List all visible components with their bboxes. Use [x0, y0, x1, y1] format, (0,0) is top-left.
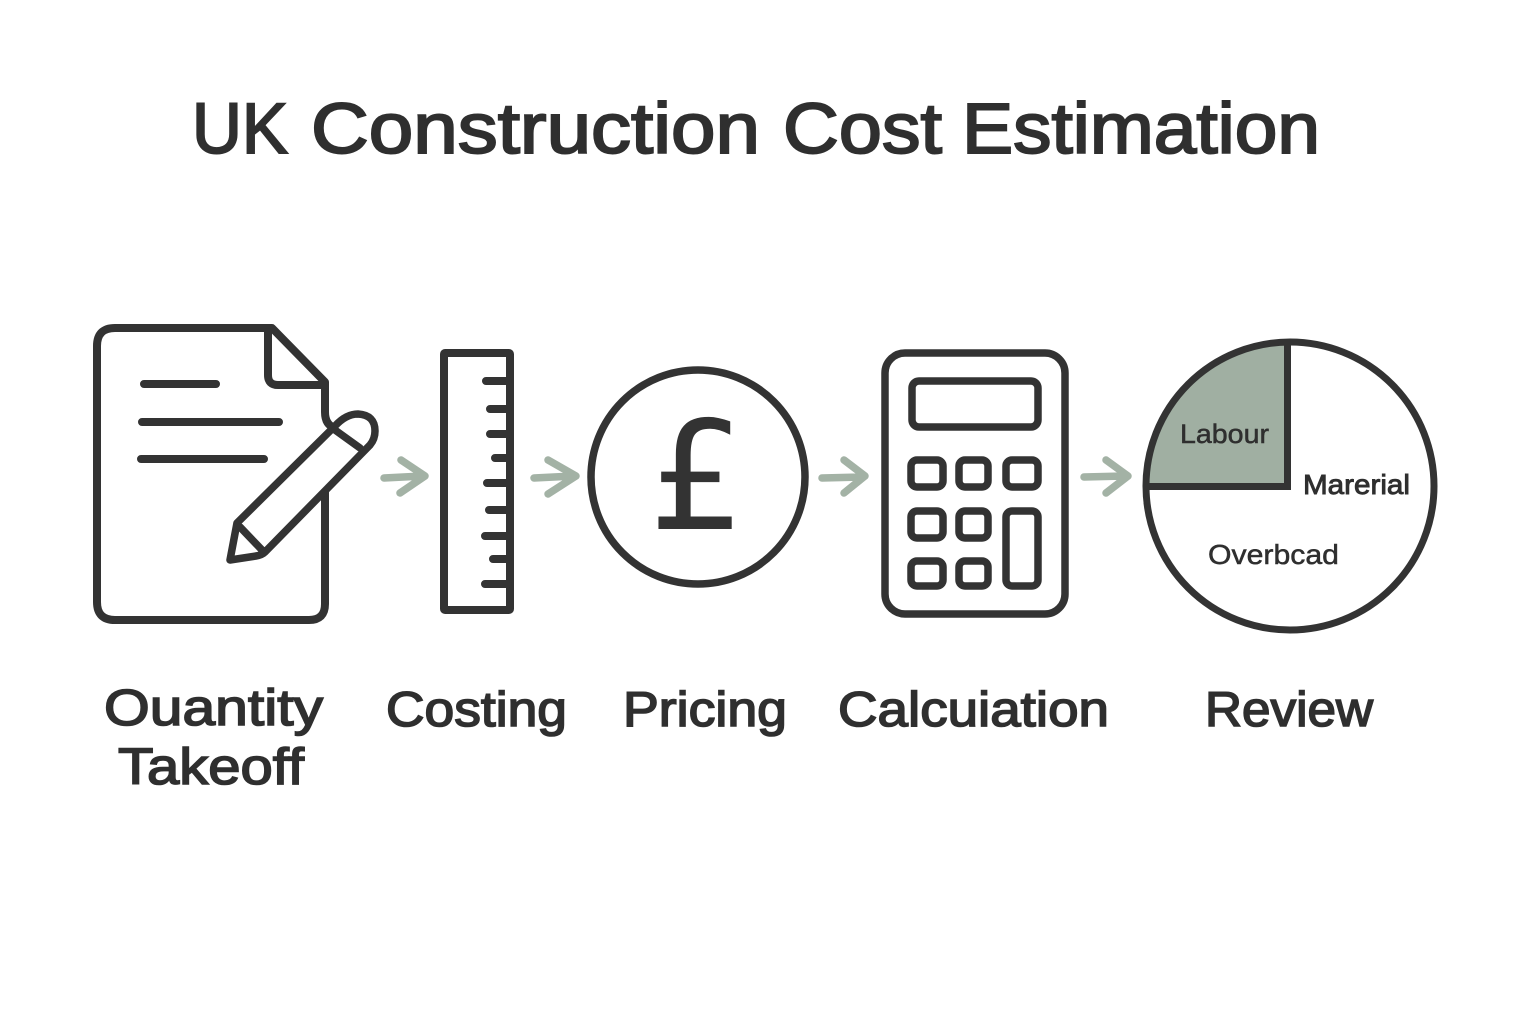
label: costing: Costing — [386, 683, 567, 737]
label: labour: Labour — [1180, 419, 1269, 449]
title: UK — [192, 90, 288, 169]
pie chart — [1146, 342, 1434, 630]
label: material: Marerial — [1303, 469, 1410, 500]
arrow: calculation to review — [1084, 460, 1128, 493]
label: calculation: Calcuiation — [838, 683, 1109, 737]
arrow: costing to pricing — [534, 460, 576, 494]
arrow: pricing to calculation — [822, 460, 865, 493]
title: Cost — [783, 90, 942, 169]
pencil — [230, 414, 375, 560]
pencil bands — [240, 430, 360, 550]
title: Construction — [311, 90, 760, 169]
title — [192, 90, 1320, 169]
calculator keys — [911, 460, 1038, 586]
icon: ruler — [444, 353, 510, 610]
ruler body — [444, 353, 510, 610]
pound sign: £ — [649, 389, 745, 565]
label: review: Review — [1205, 683, 1374, 737]
arrow: takeoff to costing — [384, 460, 425, 493]
pie outline — [1146, 342, 1434, 630]
label: quantity takeoff: Takeoff — [118, 738, 305, 795]
label: overhead: Overbcad — [1208, 539, 1339, 570]
label: pricing: Pricing — [623, 683, 787, 737]
document text lines — [141, 384, 279, 459]
label: quantity takeoff: Ouantity — [104, 679, 324, 736]
ruler ticks — [485, 381, 508, 584]
pie sector: labour — [1147, 344, 1287, 486]
title: Estimation — [962, 90, 1320, 169]
document fold — [268, 332, 325, 385]
calculator body — [885, 353, 1065, 614]
icon: pound coin — [591, 370, 805, 584]
label: quantity takeoff — [104, 679, 324, 795]
calculator display — [912, 381, 1038, 427]
pie dividers — [1146, 342, 1288, 486]
document outline — [97, 328, 335, 620]
icon: document with pencil — [97, 328, 375, 620]
icon: calculator — [885, 353, 1065, 614]
coin circle — [591, 370, 805, 584]
